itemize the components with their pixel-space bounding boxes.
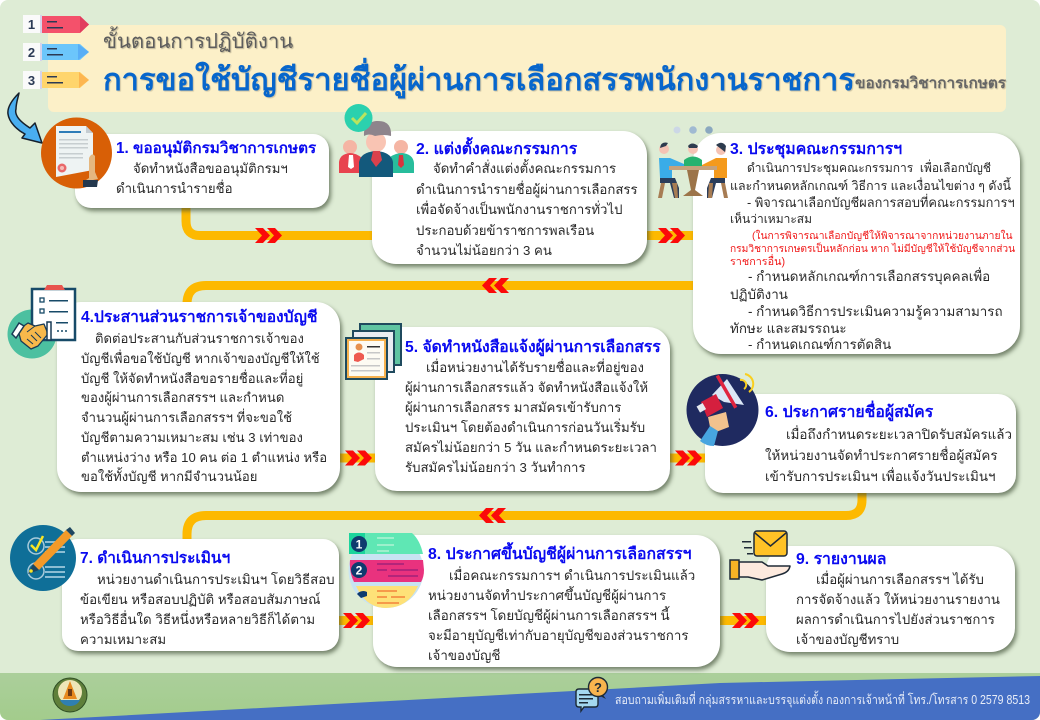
text: step 3 body — [730, 160, 1015, 352]
icon: ranked list circle: 2 — [356, 564, 363, 578]
connector: step 4 to 6 — [335, 454, 710, 462]
chevrons right row 5a — [343, 613, 370, 628]
text: step 4 body: ติดต่อประสานกับส่วนราชการเจ้าของ — [95, 331, 304, 346]
text: step 3 body: กรมวิชาการเกษตรเป็นหลักก่อน หาก ไม่มีบัญชีให้ใช้บัญชีจากส่วน — [730, 244, 1015, 255]
text: step 3 body: - กำหนดวิธีการประเมินความรู้ความสามารถ — [748, 304, 1003, 319]
text: step 4 body — [81, 331, 327, 484]
text: step 2 body: จัดทำคำสั่งแต่งตั้งคณะกรรมการ — [433, 161, 616, 176]
text: step 6 body — [765, 425, 1012, 484]
text: step 3 body: - พิจารณาเลือกบัญชีผลการสอบที่คณะกรรมการฯ — [747, 195, 1015, 210]
text: step 8 body: หน่วยงานจัดทำประกาศขึ้นบัญชีผู้ผ่านการ — [428, 588, 666, 603]
text: step 5 body — [405, 358, 657, 475]
icon: megaphone — [686, 374, 758, 446]
chevrons left row 2 — [482, 278, 509, 293]
text: step 4 body: ขอใช้ทั้งบัญชี หากมีจำนวนน้อย — [81, 469, 257, 484]
icon: meeting at a table — [658, 126, 728, 198]
text: step 9 body: เมื่อผู้ผ่านการเลือกสรรฯ ได้รับ — [816, 572, 984, 587]
icon: ranked list circle — [348, 533, 424, 608]
panel: step 1 — [75, 134, 329, 208]
text: step 8 body — [428, 566, 695, 663]
text: step 9 body: การจัดจ้างแล้ว ให้หน่วยงานรายงาน — [796, 592, 1000, 607]
chevrons right row 3b — [675, 450, 702, 466]
connector: step 3 to 4 — [187, 286, 700, 310]
text: step 6 body: ให้หน่วยงานจัดทำประกาศรายชื่อผู้สมัคร — [765, 448, 998, 463]
text: step 8 body: เมื่อคณะกรรมการฯ ดำเนินการประเมินแล้ว — [449, 568, 695, 583]
connector: step 1 to 3 — [186, 205, 700, 236]
text: step 9 body: ผลการดำเนินการไปยังส่วนราชการ — [796, 612, 995, 627]
footer contact text: สอบถามเพิ่มเติมที่ กลุ่มสรรหาและบรรจุแต่งตั้ง กองการเจ้าหน้าที่ โทร./โทรสาร 0 2579 8513 — [615, 693, 1030, 707]
heading: step 7: 7. ดำเนินการประเมินฯ — [80, 550, 230, 567]
text: step 3 body: (ในการพิจารณาเลือกบัญชีให้พิจารณาจากหน่วยงานภายใน — [752, 231, 1013, 242]
text: step 1 line 2: ดำเนินการนำรายชื่อ — [116, 181, 232, 196]
subtitle: ขั้นตอนการปฏิบัติงาน — [103, 31, 293, 53]
heading: step 2: 2. แต่งตั้งคณะกรรมการ — [416, 141, 577, 158]
text: step 7 body: หน่วยงานดำเนินการประเมินฯ โดยวิธีสอบ — [97, 572, 335, 587]
text: step 2 body: เพื่อจัดจ้างเป็นพนักงานราชการทั่วไป — [416, 202, 622, 217]
panel: step 3 — [693, 133, 1020, 354]
icon: numbered tabs — [23, 15, 89, 89]
text: step 7 body — [80, 572, 335, 647]
icon: numbered tabs: 2 — [28, 45, 35, 60]
text: step 2 body — [416, 159, 638, 258]
text: step 9 body: เจ้าของบัญชีทราบ — [796, 632, 899, 647]
text: step 9 body — [796, 570, 1000, 647]
title banner — [48, 25, 1006, 112]
text: step 3 body: เห็นว่าเหมาะสม — [730, 212, 812, 226]
panel: step 2 — [372, 131, 647, 264]
heading: step 9: 9. รายงานผล — [796, 551, 886, 568]
text: step 2 body: ประกอบด้วยข้าราชการพลเรือน — [416, 223, 594, 238]
panel: step 9 — [766, 546, 1015, 652]
text: step 8 body: จะมีอายุบัญชีเท่ากับอายุบัญชีของส่วนราชการ — [428, 628, 688, 643]
panel: step 7 — [62, 539, 339, 651]
heading: step 1: 1. ขออนุมัติกรมวิชาการเกษตร — [116, 140, 316, 157]
chevrons left row 4 — [479, 508, 506, 523]
text: step 7 body: ความเหมาะสม — [80, 632, 166, 647]
text: step 6 body: เข้ารับการประเมินฯ เพื่อแจ้งวันประเมินฯ — [765, 469, 996, 484]
text: step 2 body: จำนวนไม่น้อยกว่า 3 คน — [416, 243, 552, 258]
text: step 7 body: ข้อเขียน หรือสอบปฏิบัติ หรือสอบสัมภาษณ์ — [80, 592, 321, 607]
text: step 4 body: ตำแหน่งว่าง หรือ 10 คน ต่อ 1 ตำแหน่ง หรือ — [81, 450, 327, 465]
icon: document in orange circle — [41, 118, 112, 188]
text: step 7 body: หรือวิธีอื่นใด วิธีหนึ่งหรือหลายวิธีก็ได้ตาม — [80, 612, 315, 627]
heading: step 5: 5. จัดทำหนังสือแจ้งผู้ผ่านการเลือกสรร — [405, 339, 661, 356]
icon: committee people with check — [339, 104, 414, 177]
text: step 5 body: ผู้ผ่านการเลือกสรร มาสมัครเข้ารับการ — [405, 400, 621, 415]
icon: stacked applicant cards — [346, 324, 401, 379]
title suffix: ของกรมวิชาการเกษตร — [855, 75, 1006, 92]
chevrons right row 1b — [658, 228, 685, 243]
connector: step 6 to 7 — [187, 490, 862, 545]
panel: step 6 — [705, 394, 1016, 493]
text: step 6 body: เมื่อถึงกำหนดระยะเวลาปิดรับสมัครแล้ว — [786, 427, 1012, 442]
icon: checklist with pencil — [10, 525, 76, 591]
chevrons right row 3a — [345, 450, 372, 466]
text: step 5 body: รับสมัครไม่น้อยกว่า 3 วันทำการ — [405, 460, 586, 475]
icon: chat bubbles with question mark — [576, 678, 608, 711]
text: step 5 body: สมัครไม่น้อยกว่า 5 วัน และกำหนดระยะเวลา — [405, 440, 657, 455]
text: step 3 body: ปฏิบัติงาน — [730, 287, 788, 302]
panel: step 8 — [373, 535, 720, 667]
text: step 3 body: ทักษะ และสมรรถนะ — [730, 321, 847, 336]
heading: step 3: 3. ประชุมคณะกรรมการฯ — [730, 141, 902, 158]
logo: department seal — [53, 678, 87, 712]
text: step 3 body: ดำเนินการประชุมคณะกรรมการ เพื่อเลือกบัญชี — [747, 161, 991, 175]
chevrons right row 1a — [255, 228, 282, 243]
icon: handshake with clipboard — [8, 285, 75, 358]
text: step 5 body: เมื่อหน่วยงานได้รับรายชื่อและที่อยู่ของ — [426, 360, 644, 375]
icon: chat bubbles with question mark: ? — [594, 680, 602, 695]
text: step 8 body: เลือกสรรฯ โดยบัญชีผู้ผ่านการเลือกสรรฯ นี้ — [428, 608, 670, 623]
panel: step 5 — [375, 327, 670, 491]
text: step 4 body: บัญชีเพื่อขอใช้บัญชี หากเจ้าของบัญชีให้ใช้ — [81, 351, 320, 366]
panel: step 4 — [57, 302, 340, 492]
text: step 5 body: ผู้ผ่านการเลือกสรรแล้ว จัดทำหนังสือแจ้งให้ — [405, 380, 648, 395]
text: step 2 body: ดำเนินการนำรายชื่อผู้ผ่านการเลือกสรร — [416, 182, 638, 197]
text: step 4 body: บัญชี ให้จัดทำหนังสือขอรายชื่อและที่อยู่ — [81, 371, 303, 386]
text: step 3 body: - กำหนดเกณฑ์การตัดสิน — [748, 337, 891, 352]
icon: numbered tabs: 3 — [28, 73, 35, 88]
main title: การขอใช้บัญชีรายชื่อผู้ผ่านการเลือกสรรพนักงานราชการ — [103, 62, 855, 97]
heading: step 6: 6. ประกาศรายชื่อผู้สมัคร — [765, 404, 933, 421]
text: step 4 body: ของผู้ผ่านการเลือกสรรฯ และกำหนด — [81, 390, 284, 405]
icon: numbered tabs: 1 — [28, 17, 35, 32]
text: step 1 line 1: จัดทำหนังสือขออนุมัติกรมฯ — [133, 161, 288, 176]
text: step 3 body: - กำหนดหลักเกณฑ์การเลือกสรรบุคคลเพื่อ — [748, 269, 990, 284]
icon: ranked list circle: 1 — [356, 538, 363, 552]
text: step 5 body: ประเมินฯ โดยต้องดำเนินการก่อนวันเริ่มรับ — [405, 420, 645, 435]
icon: hand with envelope — [730, 531, 790, 580]
chevrons right row 5b — [732, 613, 759, 628]
text: step 3 body: และกำหนดหลักเกณฑ์ วิธีการ และเงื่อนไขต่าง ๆ ดังนี้ — [730, 179, 1011, 193]
text: step 4 body: บัญชีตามความเหมาะสม เช่น 3 เท่าของ — [81, 430, 303, 445]
connector: step 7 to 9 — [335, 616, 770, 625]
heading: step 4: 4.ประสานส่วนราชการเจ้าของบัญชี — [81, 309, 317, 326]
icon: blue curved arrow — [8, 93, 42, 143]
text: step 8 body: เจ้าของบัญชี — [428, 648, 500, 663]
text: step 4 body: จำนวนผู้ผ่านการเลือกสรรฯ ที่จะขอใช้ — [81, 410, 292, 425]
heading: step 8: 8. ประกาศขึ้นบัญชีผู้ผ่านการเลือกสรรฯ — [428, 546, 692, 563]
text: step 3 body: ราชการอื่น) — [730, 256, 785, 268]
